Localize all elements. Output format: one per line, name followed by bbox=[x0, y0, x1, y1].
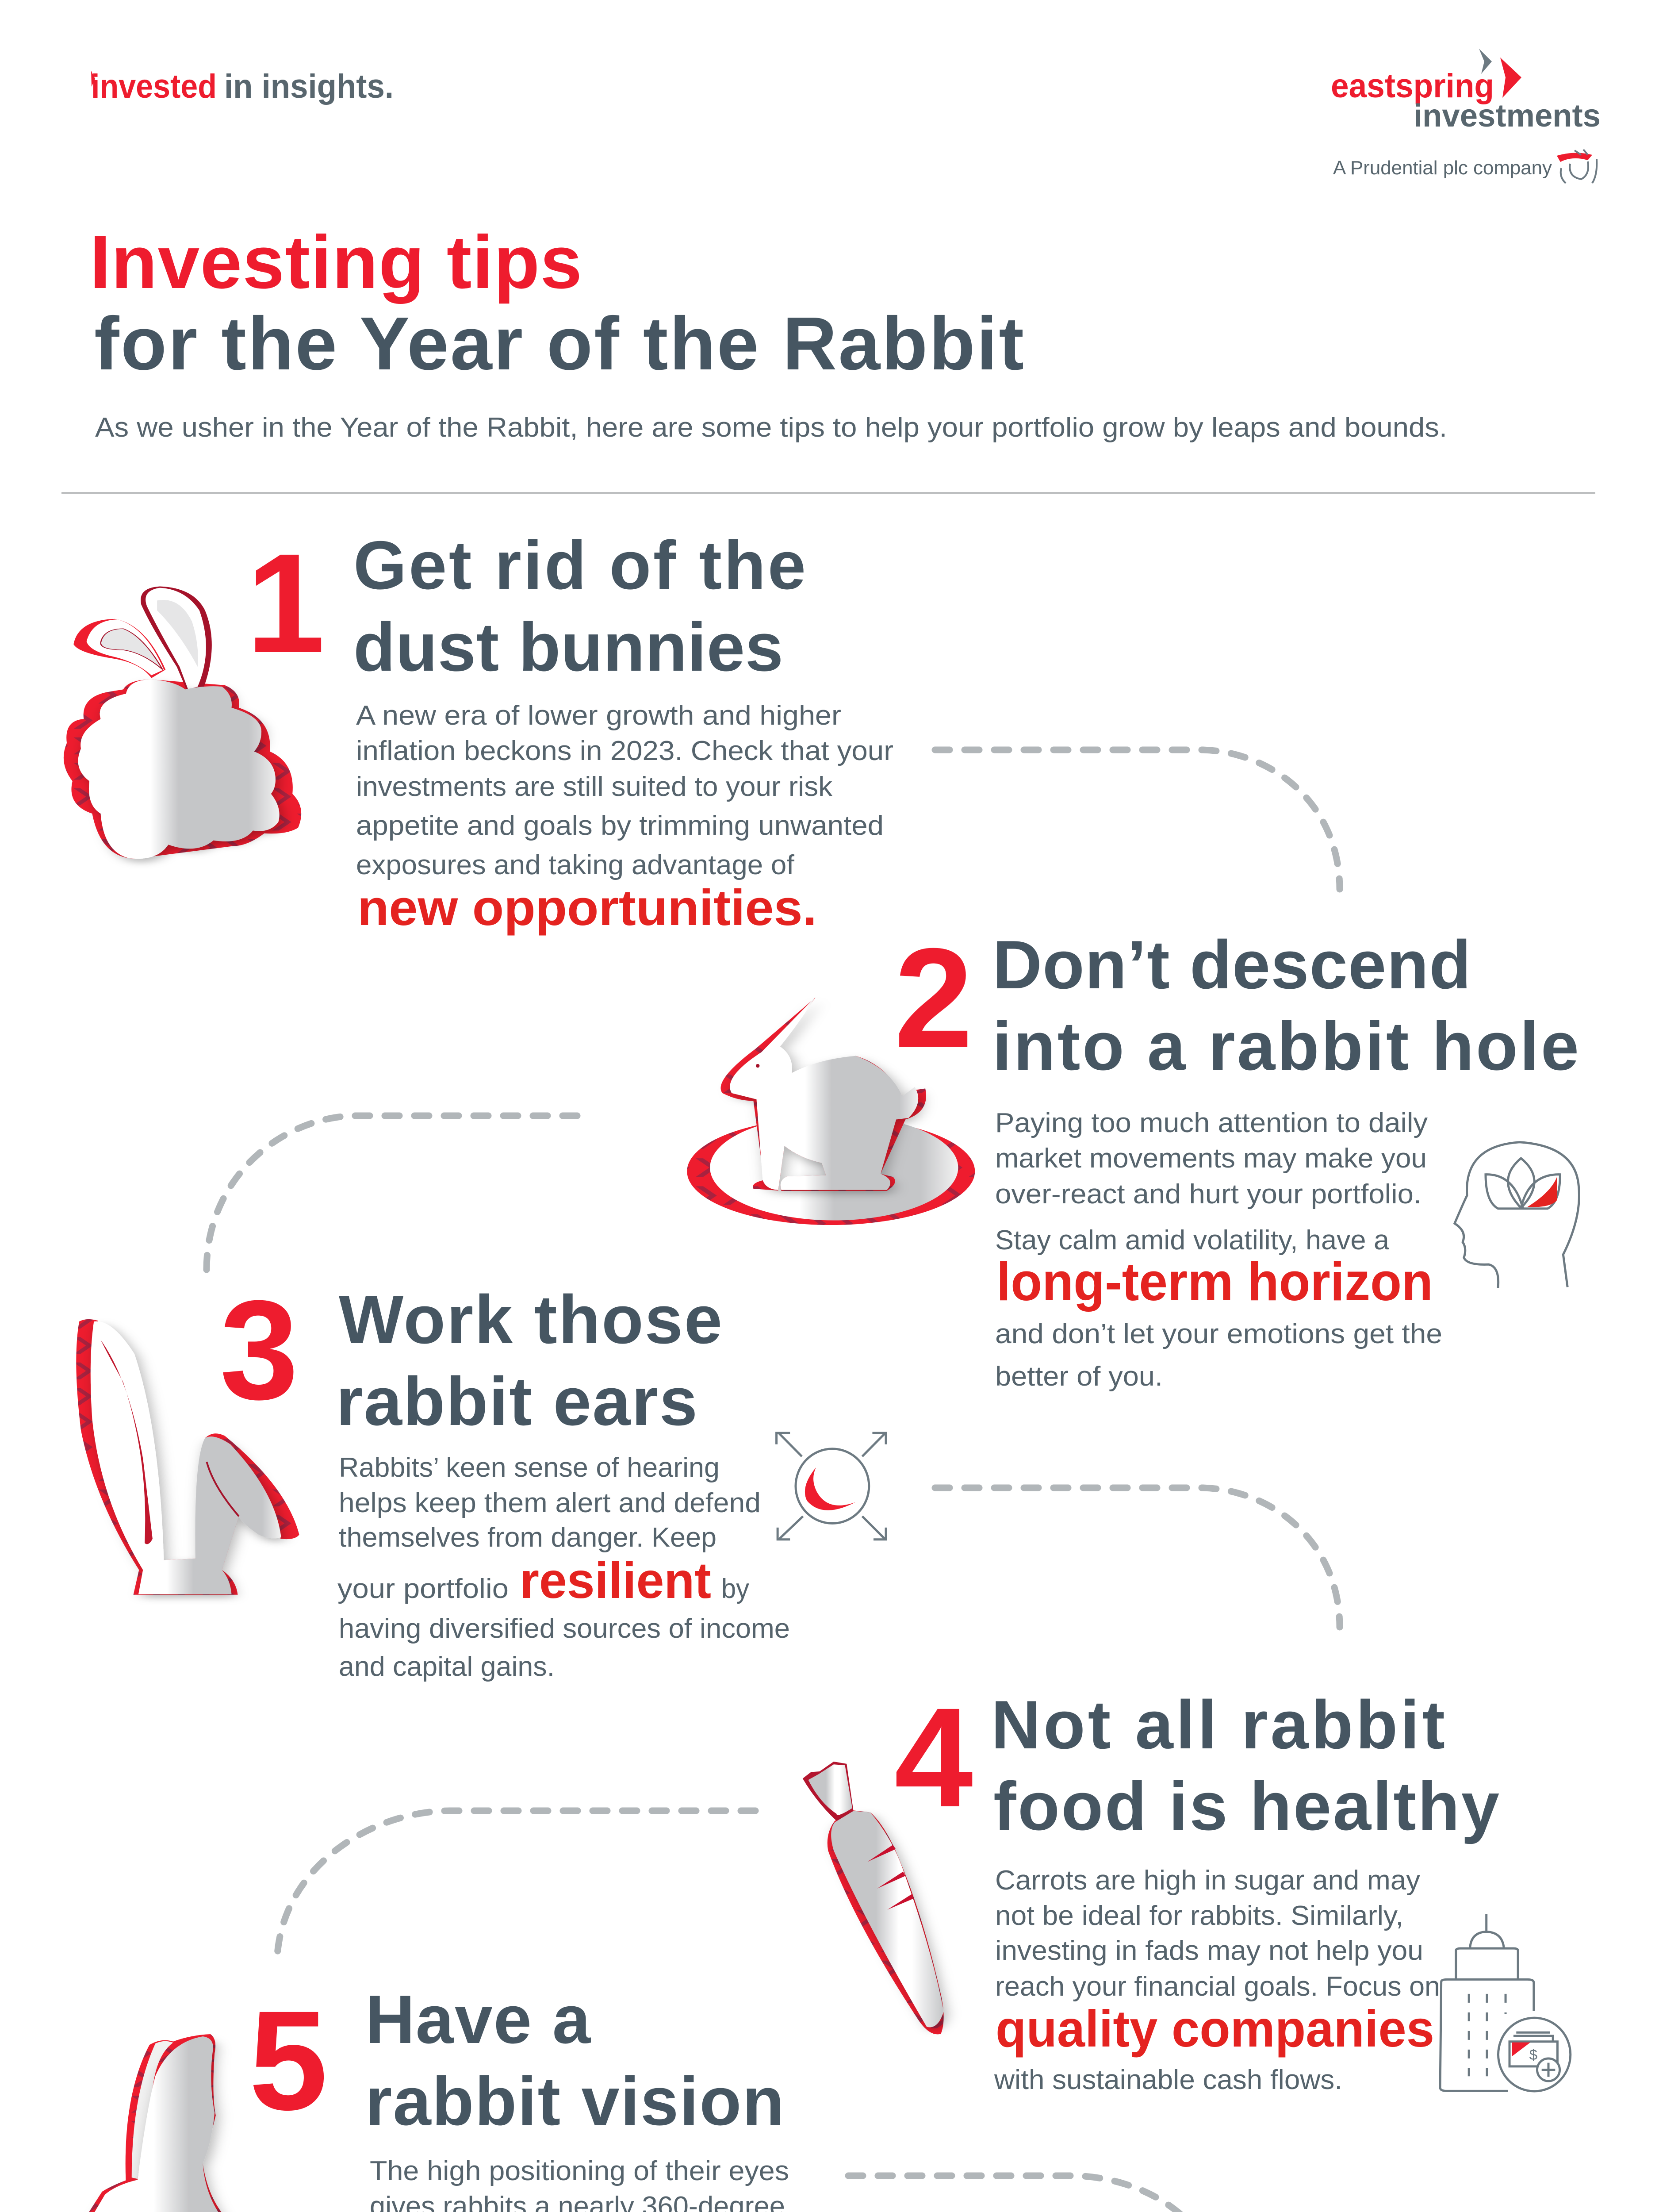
body text 3: helps keep them alert and defend bbox=[339, 1488, 761, 1518]
tagline: invested in insights bbox=[91, 68, 394, 105]
number 5: 5 bbox=[249, 1981, 328, 2139]
heading 4: food is healthy bbox=[993, 1768, 1499, 1844]
heading 5 bbox=[365, 1981, 784, 2139]
body text 4: not be ideal for rabbits. Similarly, bbox=[995, 1901, 1403, 1931]
panel: tip 1 bbox=[64, 524, 893, 936]
subtitle: As we usher in the Year of the Rabbit, here are some tips to help your portfolio grow by leaps and bounds. bbox=[95, 412, 1447, 443]
body text 5 bbox=[370, 2156, 789, 2212]
body text 2 bbox=[995, 1108, 1442, 1392]
dashed connector 1 to 2 bbox=[935, 750, 1340, 889]
heading 5: Have a bbox=[365, 1981, 591, 2058]
body text 1: new opportunities. bbox=[357, 880, 817, 936]
panel: tip 2 bbox=[687, 918, 1579, 1392]
body text 2: Stay calm amid volatility, have a bbox=[995, 1225, 1390, 1256]
icon: head with lotus bbox=[1455, 1142, 1579, 1288]
panel: tip 5 bbox=[47, 1981, 892, 2212]
title: for the Year of the Rabbit bbox=[94, 302, 1024, 386]
body text 2: Paying too much attention to daily bbox=[995, 1108, 1428, 1138]
body text 2: better of you. bbox=[995, 1361, 1163, 1392]
body text 3: having diversified sources of income bbox=[339, 1613, 790, 1644]
dashed connector 2 to 3 bbox=[207, 1116, 577, 1270]
panel: tip 4 bbox=[803, 1678, 1571, 2095]
body text 3 bbox=[337, 1452, 790, 1682]
illustration: rabbit ears bbox=[76, 1319, 299, 1595]
icon: office building with cash: $ bbox=[1529, 2047, 1537, 2063]
heading 1: dust bunnies bbox=[353, 609, 783, 685]
body text 4: reach your financial goals. Focus on bbox=[995, 1971, 1440, 2002]
tagline: invested in insights: invested bbox=[91, 68, 217, 105]
heading 2: Don’t descend bbox=[992, 926, 1471, 1003]
body text 5: The high positioning of their eyes bbox=[370, 2156, 789, 2186]
logo: eastspring investments: investments bbox=[1414, 98, 1601, 134]
body text 3: your portfolio bbox=[337, 1574, 509, 1604]
body text 1: exposures and taking advantage of bbox=[356, 850, 795, 880]
heading 3 bbox=[336, 1281, 722, 1440]
heading 2 bbox=[992, 926, 1579, 1084]
number 2: 2 bbox=[894, 918, 973, 1077]
heading 4 bbox=[991, 1686, 1499, 1844]
body text 3: by bbox=[721, 1574, 749, 1604]
title bbox=[90, 220, 1024, 386]
body text 1: inflation beckons in 2023. Check that your bbox=[356, 736, 893, 766]
heading 3: rabbit ears bbox=[336, 1363, 697, 1440]
body text 3: Rabbits’ keen sense of hearing bbox=[339, 1452, 720, 1483]
title: Investing tips bbox=[90, 220, 582, 304]
icon: circle with arrows bbox=[777, 1433, 886, 1540]
number 4: 4 bbox=[894, 1678, 974, 1836]
body text 1: investments are still suited to your risk bbox=[356, 772, 833, 802]
heading 3: Work those bbox=[339, 1281, 722, 1358]
heading 4: Not all rabbit bbox=[991, 1686, 1445, 1763]
body text 2: over-react and hurt your portfolio. bbox=[995, 1179, 1421, 1210]
dashed connector 3 to 4 bbox=[935, 1488, 1340, 1627]
heading 5: rabbit vision bbox=[365, 2063, 784, 2139]
body text 4 bbox=[994, 1865, 1440, 2095]
body text 4: with sustainable cash flows. bbox=[994, 2065, 1342, 2095]
body text 2: market movements may make you bbox=[995, 1143, 1427, 1174]
body text 3: themselves from danger. Keep bbox=[339, 1522, 716, 1553]
body text 1: appetite and goals by trimming unwanted bbox=[356, 810, 884, 841]
logo: a Prudential plc company: A Prudential plc company bbox=[1333, 157, 1552, 179]
panel: tip 3 bbox=[76, 1271, 886, 1682]
dashed connector 4 to 5 bbox=[277, 1811, 755, 1966]
body text 2: and don’t let your emotions get the bbox=[995, 1319, 1442, 1349]
body text 4: quality companies bbox=[996, 2000, 1434, 2058]
body text 1: A new era of lower growth and higher bbox=[356, 700, 841, 731]
number 3: 3 bbox=[220, 1271, 299, 1429]
logo: eastspring investments: eastspring bbox=[1331, 67, 1494, 105]
heading 1 bbox=[353, 527, 806, 685]
body text 3: and capital gains. bbox=[339, 1651, 555, 1682]
number 1: 1 bbox=[246, 524, 325, 682]
body text 1 bbox=[356, 700, 893, 936]
body text 4: investing in fads may not help you bbox=[995, 1936, 1423, 1966]
heading 2: into a rabbit hole bbox=[992, 1008, 1579, 1084]
dashed connector 5 to 6 bbox=[848, 2176, 1226, 2212]
illustration: carrot bbox=[803, 1762, 944, 2034]
logo: eastspring investments bbox=[1331, 49, 1601, 134]
body text 4: Carrots are high in sugar and may bbox=[995, 1865, 1420, 1896]
body text 2: long-term horizon bbox=[996, 1252, 1433, 1312]
illustration: rabbit at hole bbox=[687, 997, 975, 1225]
tagline: invested in insights: in insights. bbox=[224, 68, 394, 105]
body text 3: resilient bbox=[520, 1552, 711, 1609]
illustration: dust bunny bbox=[64, 586, 301, 859]
heading 1: Get rid of the bbox=[353, 527, 806, 603]
logo: a Prudential plc company bbox=[1333, 150, 1597, 183]
icon: office building with cash bbox=[1440, 1914, 1571, 2091]
illustration: rabbit head bbox=[47, 2034, 339, 2212]
